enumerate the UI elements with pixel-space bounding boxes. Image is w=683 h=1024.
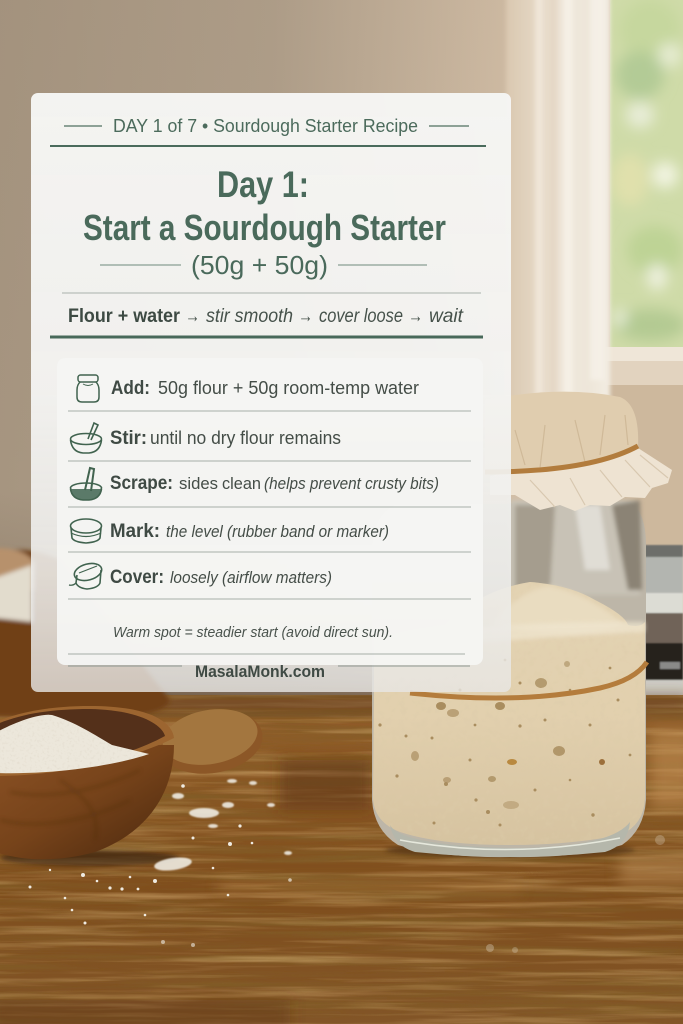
starter culture bbox=[373, 582, 645, 845]
step: stir bbox=[70, 423, 341, 453]
step: cover: loosely (airflow matters) bbox=[170, 569, 332, 587]
wooden spoon bbox=[156, 702, 268, 781]
background: kitchen wall bbox=[0, 0, 683, 700]
step: scrape: clean bbox=[222, 474, 261, 493]
recipe card bbox=[31, 93, 511, 692]
card panel bbox=[31, 93, 511, 692]
back wooden bowl bbox=[0, 548, 170, 716]
sourdough jar bbox=[372, 392, 672, 858]
summary line: stir smooth bbox=[206, 306, 293, 327]
step: add bbox=[77, 375, 419, 402]
summary line: → bbox=[408, 306, 423, 327]
icon: jar bbox=[77, 375, 99, 402]
step: scrape bbox=[70, 468, 439, 500]
jar glass body bbox=[372, 502, 646, 857]
title: Start a Sourdough Starter bbox=[83, 207, 446, 248]
paper lid bbox=[485, 392, 638, 472]
step: add: Add: bbox=[111, 378, 150, 399]
step: cover bbox=[69, 561, 332, 589]
summary line: → bbox=[185, 306, 200, 327]
steps panel bbox=[57, 358, 483, 665]
background: sheer curtain bbox=[506, 0, 610, 400]
icon: marked container bbox=[70, 519, 102, 543]
background: window with blurred garden bbox=[610, 0, 683, 350]
step: stir: until no dry flour remains bbox=[150, 428, 341, 448]
title: Day 1: bbox=[217, 164, 309, 205]
summary line: cover loose bbox=[319, 306, 403, 327]
step: scrape: (helps prevent crusty bits) bbox=[264, 474, 439, 493]
eyebrow: day counter: DAY 1 of 7 • Sourdough Starter Recipe bbox=[113, 116, 418, 136]
step: mark: the level (rubber band or marker) bbox=[166, 522, 389, 541]
step: cover: Cover: bbox=[110, 567, 164, 588]
icon: bowl with scraper bbox=[70, 468, 102, 500]
wooden table bbox=[0, 695, 683, 1024]
tip: Warm spot = steadier start (avoid direct sun). bbox=[113, 625, 393, 641]
icon: bowl with whisk bbox=[70, 423, 102, 453]
icon: covered container bbox=[69, 561, 104, 589]
background: kitchen scale bbox=[645, 545, 683, 724]
summary line: wait bbox=[429, 306, 464, 327]
title bbox=[83, 164, 446, 248]
step: add: 50g flour + 50g room-temp water bbox=[158, 378, 419, 398]
bubbles bbox=[378, 659, 631, 826]
base glass bbox=[390, 822, 630, 857]
upper rubber band bbox=[485, 446, 638, 472]
summary line: Flour + water bbox=[68, 306, 181, 327]
background: window sill bbox=[596, 347, 683, 550]
cloth ruffle bbox=[490, 448, 672, 511]
glass highlights bbox=[510, 500, 642, 595]
summary line: → bbox=[298, 306, 313, 327]
step: mark: Mark: bbox=[110, 521, 160, 542]
lower rubber band bbox=[410, 662, 647, 698]
step: scrape: Scrape: bbox=[110, 473, 173, 494]
summary line bbox=[68, 306, 464, 327]
step: mark bbox=[70, 519, 389, 543]
spilled flour bbox=[28, 779, 665, 953]
footer brand: MasalaMonk.com bbox=[195, 662, 325, 681]
front wooden bowl of flour bbox=[0, 706, 180, 866]
step: scrape: sides bbox=[179, 474, 218, 493]
subtitle: quantities: (50g + 50g) bbox=[191, 250, 328, 280]
step: stir: Stir: bbox=[110, 428, 147, 449]
